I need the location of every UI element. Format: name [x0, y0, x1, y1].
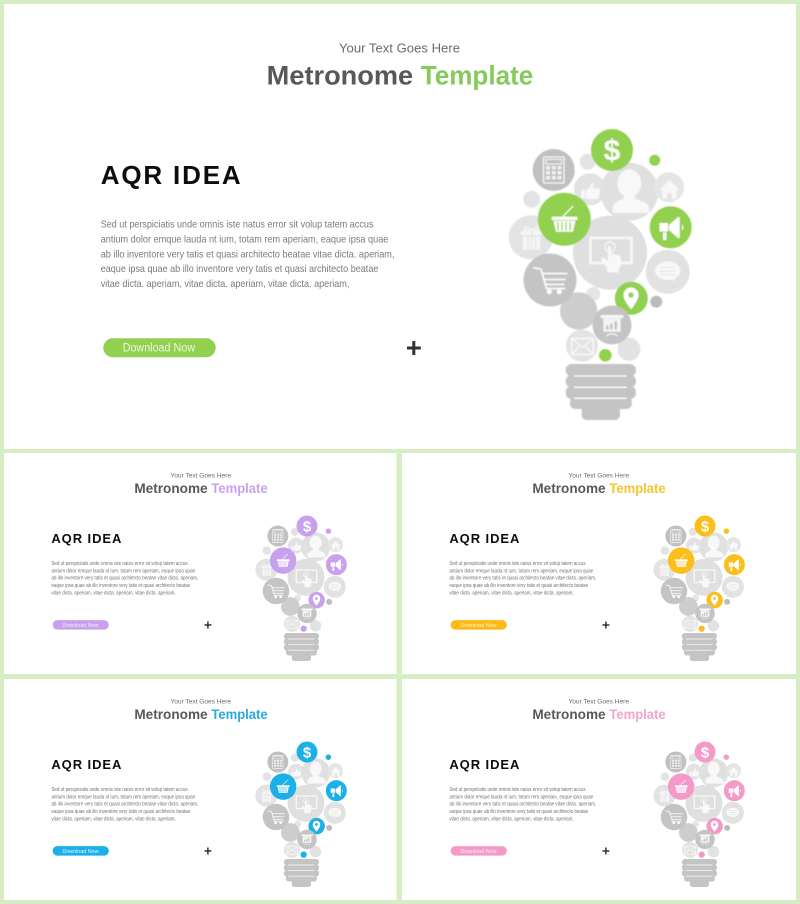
- light bulb illustration: [255, 742, 347, 887]
- body paragraph: Sed ut perspiciatis unde omnis iste natus error sit volup tatem accus: [449, 787, 586, 793]
- panel: blue slide: [4, 679, 396, 900]
- body paragraph: vitae dicta. aperiam, vitae dicta. aperiam, vitae dicta. aperiam,: [51, 816, 176, 822]
- icon: location pin on accent circle: [615, 282, 648, 315]
- body paragraph: eaque ipsa quae ab illo inventore very tatis et quasi architecto beatae: [101, 263, 379, 275]
- icon: megaphone on accent circle: [650, 206, 692, 248]
- body paragraph: antium dolor emque lauda nt ium, totam rem aperiam, eaque ipsa quae: [449, 568, 593, 574]
- body paragraph: Sed ut perspiciatis unde omnis iste natus error sit volup tatem accus: [101, 219, 373, 231]
- button: download now: Download Now: [62, 623, 99, 629]
- heading: AQR IDEA: AQR IDEA: [449, 757, 520, 772]
- title: Metronome: [532, 707, 606, 722]
- body paragraph: eaque ipsa quae ab illo inventore very tatis et quasi architecto beatae: [449, 809, 588, 815]
- title: Template: [609, 707, 666, 722]
- button: download now: [103, 338, 216, 357]
- accent dot top: [649, 155, 660, 166]
- heading: AQR IDEA: AQR IDEA: [101, 160, 241, 190]
- icon: basket on accent circle: [538, 193, 591, 246]
- title: [267, 60, 533, 90]
- body paragraph: antium dolor emque lauda nt ium, totam rem aperiam, eaque ipsa quae: [449, 794, 593, 800]
- body paragraph: ab illo inventore very tatis et quasi architecto beatae vitae dicta. aperiam,: [449, 576, 596, 582]
- subtitle: Your Text Goes Here: [170, 698, 231, 705]
- accent dot bottom: [599, 349, 612, 362]
- icon: plus: [602, 622, 609, 628]
- title: Template: [609, 481, 666, 496]
- icon: gift: [509, 215, 553, 259]
- icon: envelope: [566, 330, 598, 362]
- heading: AQR IDEA: AQR IDEA: [51, 757, 122, 772]
- body paragraph: [101, 219, 394, 290]
- icon: dollar on accent circle: $: [604, 134, 621, 168]
- title: [532, 481, 666, 496]
- body paragraph: antium dolor emque lauda nt ium, totam rem aperiam, eaque ipsa quae: [101, 234, 389, 246]
- icon: plus: [602, 848, 609, 854]
- button: download now: [451, 846, 507, 856]
- panel: yellow slide: [402, 453, 796, 674]
- title: Metronome: [267, 60, 413, 90]
- light bulb illustration: [653, 516, 745, 661]
- subtitle: Your Text Goes Here: [568, 698, 629, 705]
- panel: purple slide: [4, 453, 396, 674]
- heading: AQR IDEA: AQR IDEA: [51, 531, 122, 546]
- icon: calculator: [533, 149, 575, 191]
- small plain circles: [523, 154, 662, 361]
- icon: plus: [407, 341, 421, 355]
- body paragraph: eaque ipsa quae ab illo inventore very tatis et quasi architecto beatae: [51, 809, 190, 815]
- title: [134, 481, 268, 496]
- body paragraph: vitae dicta. aperiam, vitae dicta. aperiam, vitae dicta. aperiam,: [51, 590, 176, 596]
- body paragraph: [51, 561, 198, 596]
- title: Metronome: [532, 481, 606, 496]
- button: download now: [53, 846, 109, 856]
- heading: AQR IDEA: AQR IDEA: [449, 531, 520, 546]
- panel: pink slide: [402, 679, 796, 900]
- button: download now: [451, 620, 507, 630]
- body paragraph: eaque ipsa quae ab illo inventore very tatis et quasi architecto beatae: [51, 583, 190, 589]
- title: Template: [211, 707, 268, 722]
- title: Template: [211, 481, 268, 496]
- icon: touch screen: [573, 216, 647, 290]
- button: download now: [53, 620, 109, 630]
- body paragraph: ab illo inventore very tatis et quasi architecto beatae vitae dicta. aperiam,: [449, 802, 596, 808]
- body paragraph: [51, 787, 198, 822]
- title: Template: [421, 60, 533, 90]
- icon: person: [600, 163, 658, 221]
- body paragraph: ab illo inventore very tatis et quasi architecto beatae vitae dicta. aperiam,: [51, 802, 198, 808]
- body paragraph: Sed ut perspiciatis unde omnis iste natus error sit volup tatem accus: [51, 787, 188, 793]
- light bulb illustration: [255, 516, 347, 661]
- subtitle: Your Text Goes Here: [568, 472, 629, 479]
- button: download now: Download Now: [123, 343, 196, 355]
- title: Metronome: [134, 707, 208, 722]
- bulb base: [566, 364, 636, 420]
- icon: dollar on accent circle: [591, 129, 633, 171]
- body paragraph: vitae dicta. aperiam, vitae dicta. aperiam, vitae dicta. aperiam,: [101, 278, 349, 290]
- body paragraph: eaque ipsa quae ab illo inventore very tatis et quasi architecto beatae: [449, 583, 588, 589]
- icon: presentation board: [592, 306, 632, 344]
- subtitle: Your Text Goes Here: [170, 472, 231, 479]
- icon: chat bubble: [646, 250, 690, 294]
- title: Metronome: [134, 481, 208, 496]
- body paragraph: [449, 561, 596, 596]
- body paragraph: antium dolor emque lauda nt ium, totam rem aperiam, eaque ipsa quae: [51, 794, 195, 800]
- body paragraph: ab illo inventore very tatis et quasi architecto beatae vitae dicta. aperiam,: [51, 576, 198, 582]
- body paragraph: Sed ut perspiciatis unde omnis iste natus error sit volup tatem accus: [449, 561, 586, 567]
- subtitle: Your Text Goes Here: [339, 41, 460, 56]
- light bulb illustration: [509, 129, 692, 420]
- panel: main green slide: [4, 4, 796, 449]
- icon: plus: [204, 848, 211, 854]
- title: [134, 707, 268, 722]
- body paragraph: Sed ut perspiciatis unde omnis iste natus error sit volup tatem accus: [51, 561, 188, 567]
- body paragraph: ab illo inventore very tatis et quasi architecto beatae vitae dicta. aperiam,: [101, 248, 394, 260]
- icon: house: [654, 172, 684, 202]
- body paragraph: antium dolor emque lauda nt ium, totam rem aperiam, eaque ipsa quae: [51, 568, 195, 574]
- icon: thumbs up: [574, 173, 606, 205]
- icon: shopping cart: [524, 254, 576, 306]
- button: download now: Download Now: [62, 849, 99, 855]
- light bulb illustration: [653, 742, 745, 887]
- body paragraph: [449, 787, 596, 822]
- body paragraph: vitae dicta. aperiam, vitae dicta. aperiam, vitae dicta. aperiam,: [449, 816, 574, 822]
- body paragraph: vitae dicta. aperiam, vitae dicta. aperiam, vitae dicta. aperiam,: [449, 590, 574, 596]
- button: download now: Download Now: [460, 623, 497, 629]
- icon: plus: [204, 622, 211, 628]
- button: download now: Download Now: [460, 849, 497, 855]
- title: [532, 707, 666, 722]
